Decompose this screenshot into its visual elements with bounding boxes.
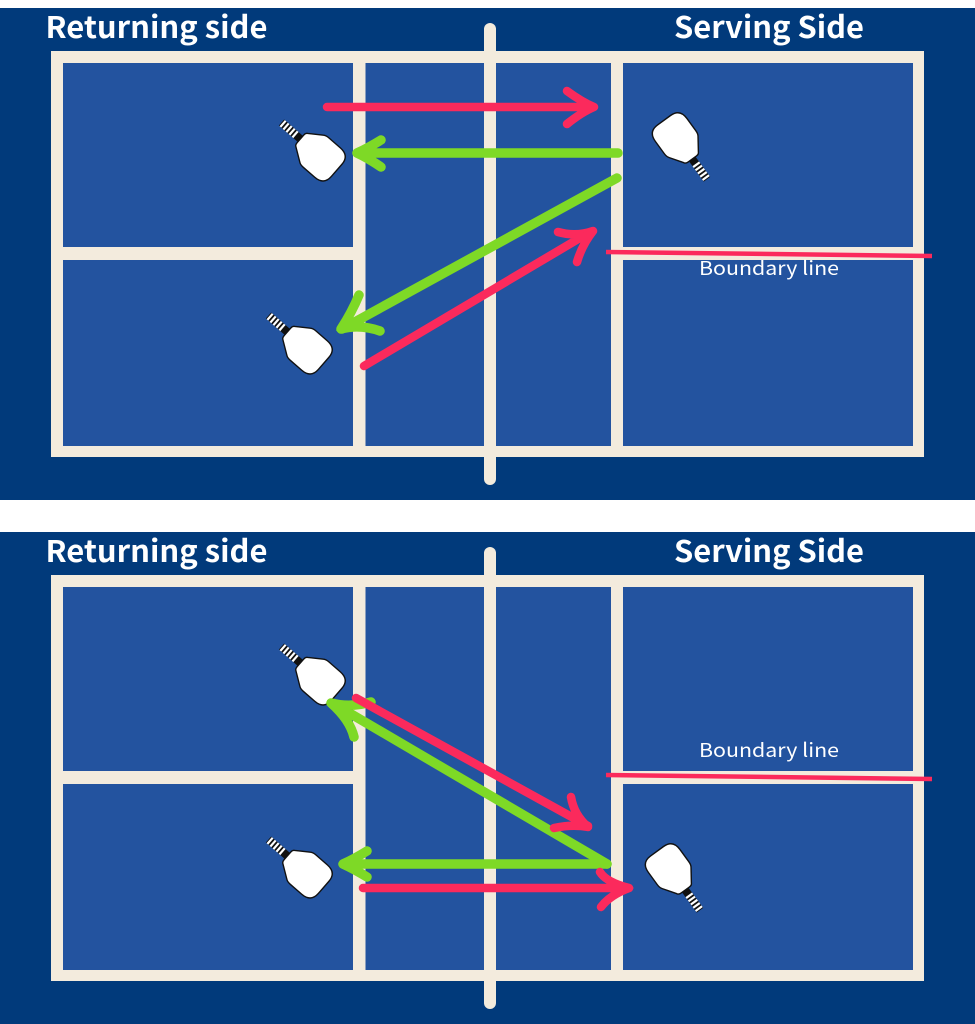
arrow: red straight serve [327, 91, 598, 124]
boundary line marker [606, 775, 932, 779]
panel: bottom court diagram [0, 527, 975, 1024]
icon: paddle top left [269, 108, 349, 185]
court surface and lines [51, 575, 924, 981]
heading: returning side: Returning side [46, 3, 268, 47]
court surround [0, 8, 975, 500]
icon: paddle serving side [648, 109, 723, 191]
court surround [0, 532, 975, 1024]
icon: paddle bottom left [256, 301, 336, 378]
icon: paddle bottom left [256, 825, 336, 902]
net line [484, 23, 496, 485]
court surface and lines [51, 51, 924, 457]
arrow: red diagonal shot [356, 698, 592, 829]
heading: returning side: Returning side [46, 527, 268, 571]
boundary line marker [606, 252, 932, 256]
net line [484, 547, 496, 1009]
panel: top court diagram [0, 3, 975, 500]
boundary line label: Boundary line [699, 736, 839, 763]
arrow: green diagonal return [336, 178, 617, 331]
arrow: red diagonal serve [364, 229, 596, 366]
arrow: green diagonal return [327, 700, 607, 864]
icon: paddle serving side [641, 840, 716, 922]
arrow: red straight shot [363, 872, 634, 907]
arrow: green straight return [353, 140, 618, 167]
arrow: green straight return [338, 851, 607, 877]
boundary line label: Boundary line [699, 254, 839, 281]
icon: paddle top left [269, 632, 349, 709]
heading: serving side: Serving Side [674, 527, 864, 571]
heading: serving side: Serving Side [674, 3, 864, 47]
